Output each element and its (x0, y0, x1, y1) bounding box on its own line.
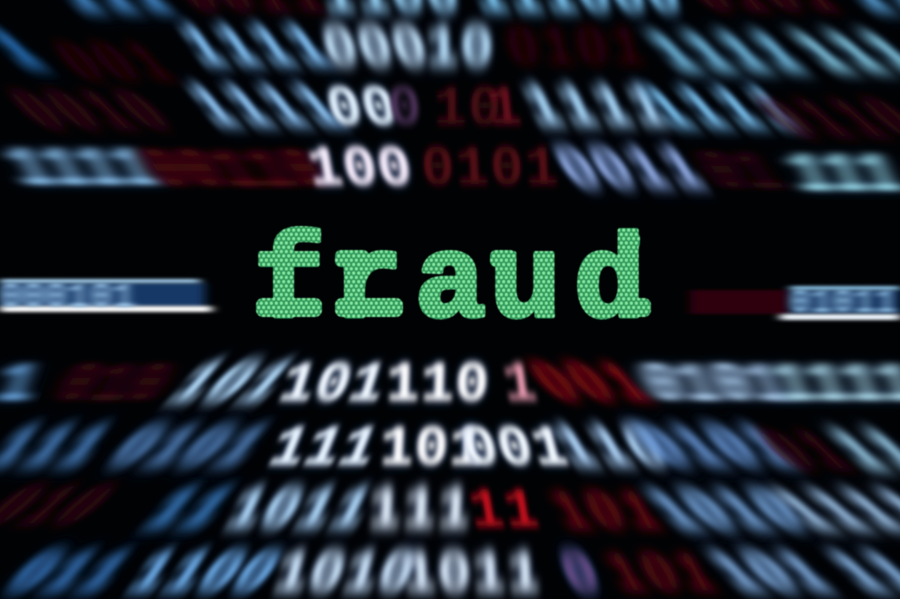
binary row 4: right streak (690, 285, 900, 323)
binary row 3 (0, 137, 900, 207)
binary row 5: 101 (149, 354, 309, 417)
binary row 7: 11 (124, 480, 250, 543)
binary row 1: 1111 (166, 17, 348, 81)
binary row 6: 111 (259, 419, 388, 481)
binary row 3: 01 (685, 141, 799, 205)
binary row 4: left streak: 000101 (0, 277, 136, 318)
binary row 6: 0101 (89, 418, 285, 481)
binary row 4: left streak (0, 277, 212, 318)
binary row 5 (0, 353, 900, 418)
binary row 2: 1 (485, 77, 526, 141)
binary row 2: 1111 (513, 77, 680, 141)
binary row 7 (0, 477, 900, 545)
binary row: top edge (34, 0, 900, 28)
binary row 3: 00110 (128, 139, 346, 203)
binary row 1: 000 (316, 19, 436, 82)
binary row 7: 11 (464, 479, 545, 543)
binary row 4: right streak: 01011 (790, 285, 897, 323)
binary row 3: 0011 (543, 140, 721, 203)
binary row 6: 01 (742, 421, 875, 485)
binary row 1: 1111 (630, 24, 826, 87)
binary row 6 (0, 417, 900, 485)
binary row 8 (0, 543, 900, 599)
binary row 5: 001 (514, 354, 671, 417)
binary row 7: 111 (366, 479, 474, 543)
binary row 2 (0, 77, 900, 153)
binary row 1: 001 (39, 34, 196, 97)
binary row 3: 100 (303, 137, 418, 201)
binary row 1 (0, 17, 900, 97)
binary row 7: 1011 (214, 480, 383, 543)
binary row 5: 1 (499, 353, 542, 417)
binary row 7: 101 (538, 481, 675, 545)
binary row 2: 00 (321, 79, 406, 142)
binary row 5: 010 (43, 355, 183, 418)
binary row 1: 10 (425, 17, 495, 81)
binary row 6: 001 (456, 419, 576, 482)
binary row 2: 1111 (627, 80, 819, 143)
binary row 2: 10 (433, 77, 503, 141)
binary row 5: 101 (271, 354, 395, 418)
binary row 7: 1010 (630, 482, 826, 545)
binary row 3: 0101 (419, 137, 561, 201)
binary row 5: 0101 (632, 353, 801, 417)
binary row 1: 0101 (500, 19, 652, 82)
binary row 6: 101 (378, 417, 485, 481)
binary row 2: 0 (385, 77, 426, 141)
binary row 6: 110 (542, 419, 682, 482)
binary row 6: 0101 (620, 418, 816, 481)
title word: fraud: fraud (254, 219, 645, 352)
binary row 5: 110 (385, 353, 491, 417)
binary row 3: 1111 (0, 139, 172, 202)
binary row 2: 1111 (174, 78, 362, 142)
